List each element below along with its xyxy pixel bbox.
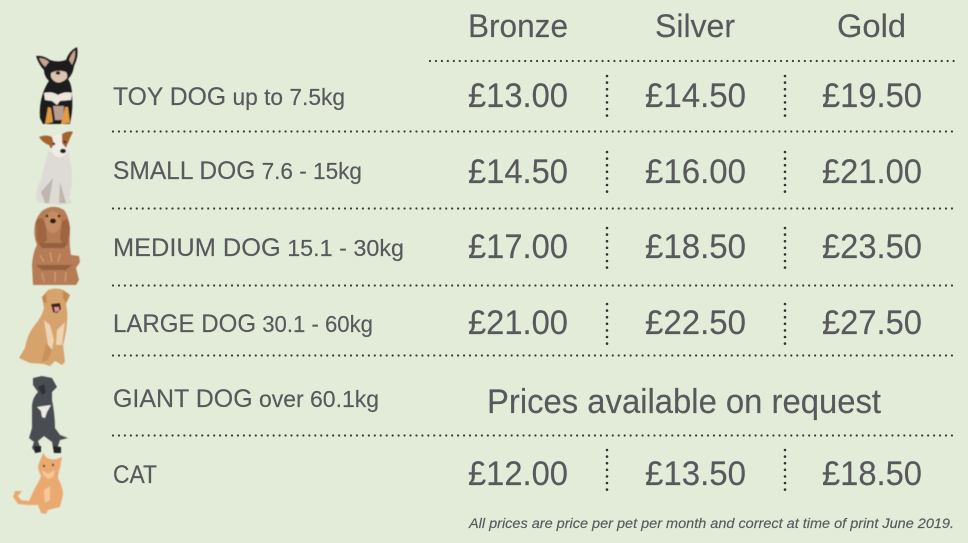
label: giant dog: GIANT DOG over 60.1kg [113,385,379,413]
column headings [468,8,906,44]
column headings: Bronze [468,8,568,44]
row: small dog: £14.50 [468,153,568,191]
row: large dog: £21.00 [468,304,568,342]
row: large dog: £27.50 [822,304,922,342]
footnote: All prices are price per pet per month and correct at time of print June 2019. [468,516,954,531]
row: toy dog: £13.00 [468,77,568,115]
row: cat: £13.50 [645,455,746,493]
row: small dog: £16.00 [645,153,746,191]
row: cat [113,455,922,493]
icon: small dog [36,131,73,205]
column headings: Gold [837,8,906,44]
label: cat: CAT [113,461,157,489]
column headings: Silver [655,8,735,44]
label: large dog: LARGE DOG 30.1 - 60kg [113,310,373,338]
icon: toy dog [36,47,78,124]
label: small dog: SMALL DOG 7.6 - 15kg [113,157,362,185]
icon: cat [13,453,63,514]
icon: large dog [19,288,70,366]
label: toy dog: TOY DOG up to 7.5kg [113,83,345,111]
icon: medium dog [32,207,80,285]
label: medium dog: MEDIUM DOG 15.1 - 30kg [113,234,404,262]
row: small dog: £21.00 [822,153,922,191]
row: cat: £12.00 [468,455,568,493]
row: giant dog [113,383,882,421]
row: small dog [113,153,922,191]
row: medium dog: £23.50 [822,228,922,266]
row: large dog [113,304,922,342]
row: medium dog: £17.00 [468,228,568,266]
row: toy dog: £14.50 [645,77,746,115]
icon: giant dog [29,376,68,453]
row: giant dog: Prices available on request [487,383,882,421]
row: medium dog [113,228,922,266]
row: cat: £18.50 [822,455,922,493]
row: large dog: £22.50 [645,304,746,342]
row: toy dog [113,77,922,115]
row: medium dog: £18.50 [645,228,746,266]
row: toy dog: £19.50 [822,77,922,115]
